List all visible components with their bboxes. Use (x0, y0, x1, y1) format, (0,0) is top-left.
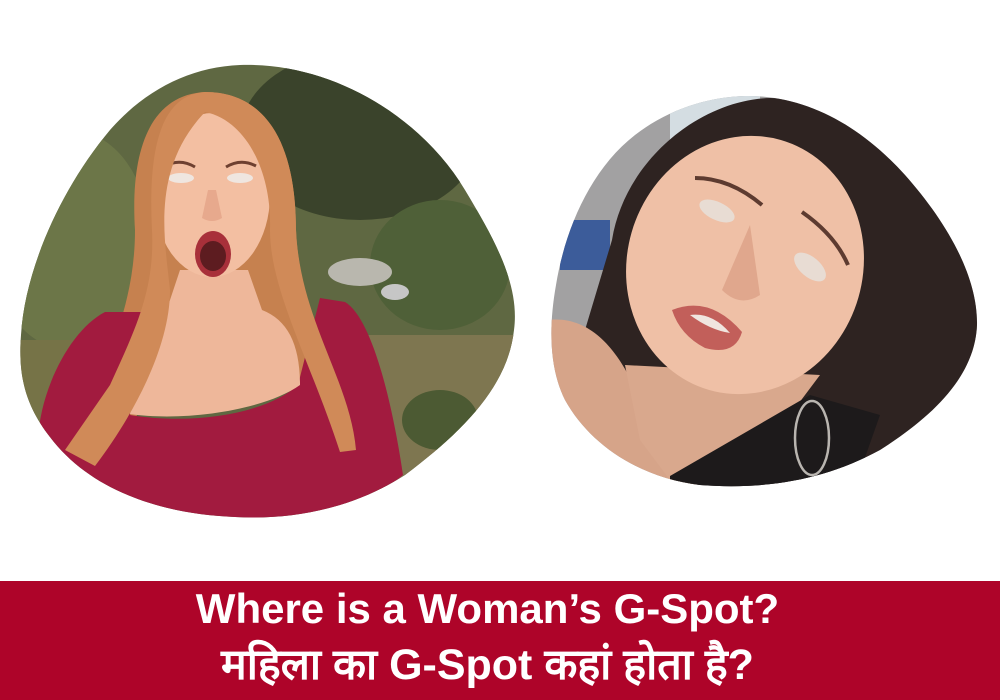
front hair strands (65, 92, 356, 466)
photo: woman with red hair and red top (20, 64, 515, 518)
face (626, 136, 864, 394)
mouth (672, 306, 742, 350)
portrait images (20, 64, 978, 518)
nose (202, 190, 222, 221)
eyes (700, 200, 734, 222)
hindi heading: महिला का G-Spot कहां होता है? (221, 641, 754, 689)
dark garment (670, 395, 880, 486)
room background (540, 90, 990, 500)
mouth (195, 231, 231, 277)
face (164, 113, 270, 270)
neck (625, 365, 820, 480)
english heading: Where is a Woman’s G-Spot? (196, 585, 779, 632)
title banner (0, 581, 1000, 700)
photo: woman with dark hair, face tilted (540, 90, 990, 500)
hoop earring (795, 401, 829, 475)
dark hair (585, 98, 985, 490)
eyes (168, 173, 194, 183)
hair back (123, 92, 305, 416)
neck and chest (130, 270, 300, 416)
shoulder (548, 320, 700, 490)
nose (722, 225, 760, 300)
red top (38, 298, 403, 525)
foliage background (20, 64, 515, 518)
blossom highlights (328, 258, 392, 286)
